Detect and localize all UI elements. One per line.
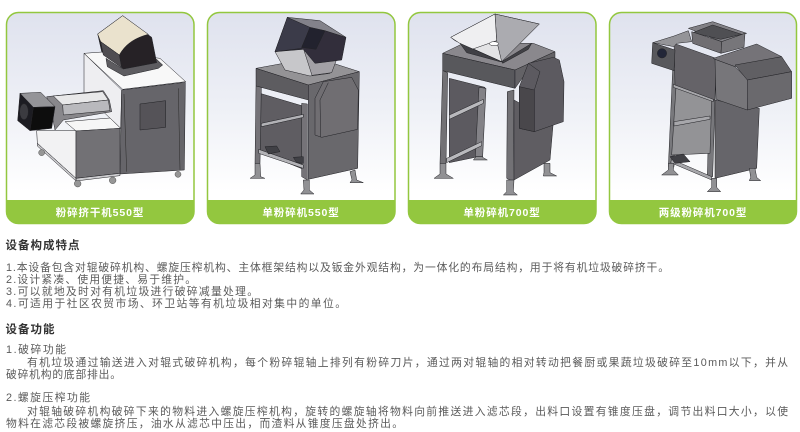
text block: crushing function <box>6 342 788 381</box>
panel: 单粉碎机550型 <box>207 12 395 224</box>
machine illustration: extruder crusher <box>18 16 186 187</box>
machine illustration: single crusher 700 <box>434 14 564 195</box>
caption: 粉碎挤干机550型 <box>56 206 144 219</box>
text block: screw press function: 2.螺旋压榨功能 <box>6 390 90 404</box>
text block: features list: 1.本设备包含对辊破碎机构、螺旋压榨机构、主体框架结构以及钣金外观结构，为一体化的布局结构，用于将有机垃圾破碎挤干。 <box>6 260 669 274</box>
text block: features list: 2.设计紧凑、使用便捷、易于维护。 <box>6 272 196 286</box>
text block: features list: 3.可以就地及时对有机垃圾进行破碎减量处理。 <box>6 284 258 298</box>
panel: 粉碎挤干机550型 <box>6 12 194 224</box>
heading: 设备功能: 设备功能 <box>6 322 55 336</box>
text block: screw press function: 对辊轴破碎机构破碎下来的物料进入螺旋压榨机构，旋转的螺旋轴将物料向前推送进入滤芯段，出料口设置有锥度压盘，调节出料口大小，以使 <box>27 404 788 418</box>
caption: 单粉碎机700型 <box>463 206 541 219</box>
text block: screw press function <box>6 390 788 430</box>
text block: features list: 4.可适用于社区农贸市场、环卫站等有机垃圾相对集中的单位。 <box>6 296 346 310</box>
text block: features list <box>6 260 669 310</box>
text block: crushing function: 1.破碎功能 <box>6 342 66 356</box>
panel: 两级粉碎机700型 <box>609 12 797 224</box>
text block: crushing function: 有机垃圾通过输送进入对辊式破碎机构，每个粉碎辊轴上排列有粉碎刀片，通过两对辊轴的相对转动把餐厨或果蔬垃圾破碎至10mm以下，并从 <box>27 355 788 369</box>
machine illustration: two-stage crusher 700 <box>652 22 792 192</box>
text block: crushing function: 破碎机构的底部排出。 <box>6 367 121 381</box>
heading: 设备构成特点: 设备构成特点 <box>6 238 80 252</box>
panel: 单粉碎机700型 <box>408 12 596 224</box>
machine illustration: single crusher 550 <box>250 17 363 194</box>
text block: screw press function: 物料在滤芯段被螺旋挤压，油水从滤芯中压出，而渣料从锥度压盘处挤出。 <box>6 416 403 430</box>
caption: 两级粉碎机700型 <box>659 206 747 219</box>
caption: 单粉碎机550型 <box>262 206 340 219</box>
